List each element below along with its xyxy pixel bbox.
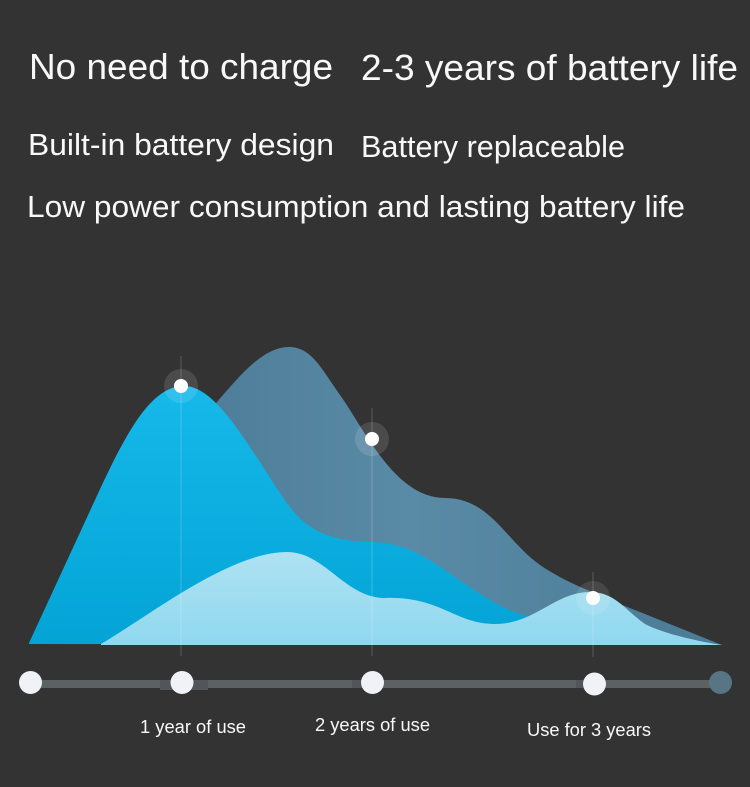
timeline <box>19 671 732 696</box>
timeline track <box>30 680 720 688</box>
label: use for 3 years: Use for 3 years <box>527 720 651 740</box>
text: built-in battery design: Built-in battery design <box>28 127 334 162</box>
front area: pale blue <box>101 552 722 645</box>
timeline end dot <box>709 671 732 694</box>
timeline dot: 1 year <box>160 671 208 694</box>
marker: year 1 <box>164 356 198 656</box>
marker: year 3 <box>576 572 610 657</box>
middle area: bright blue <box>29 386 560 645</box>
heading: no need to charge: No need to charge <box>29 46 333 87</box>
label: 2 years of use: 2 years of use <box>315 715 430 735</box>
timeline dot: 2 years <box>352 671 384 694</box>
timeline start dot <box>19 671 42 694</box>
text: battery replaceable: Battery replaceable <box>361 129 625 164</box>
back area: dark blue-grey <box>200 347 722 645</box>
area chart <box>29 347 722 657</box>
label: 1 year of use: 1 year of use <box>140 717 246 737</box>
heading: battery life: 2-3 years of battery life <box>361 47 738 88</box>
text: low power consumption: Low power consumption and lasting battery life <box>27 189 685 224</box>
marker: year 2 <box>355 408 389 656</box>
timeline dot: 3 years <box>576 672 606 696</box>
